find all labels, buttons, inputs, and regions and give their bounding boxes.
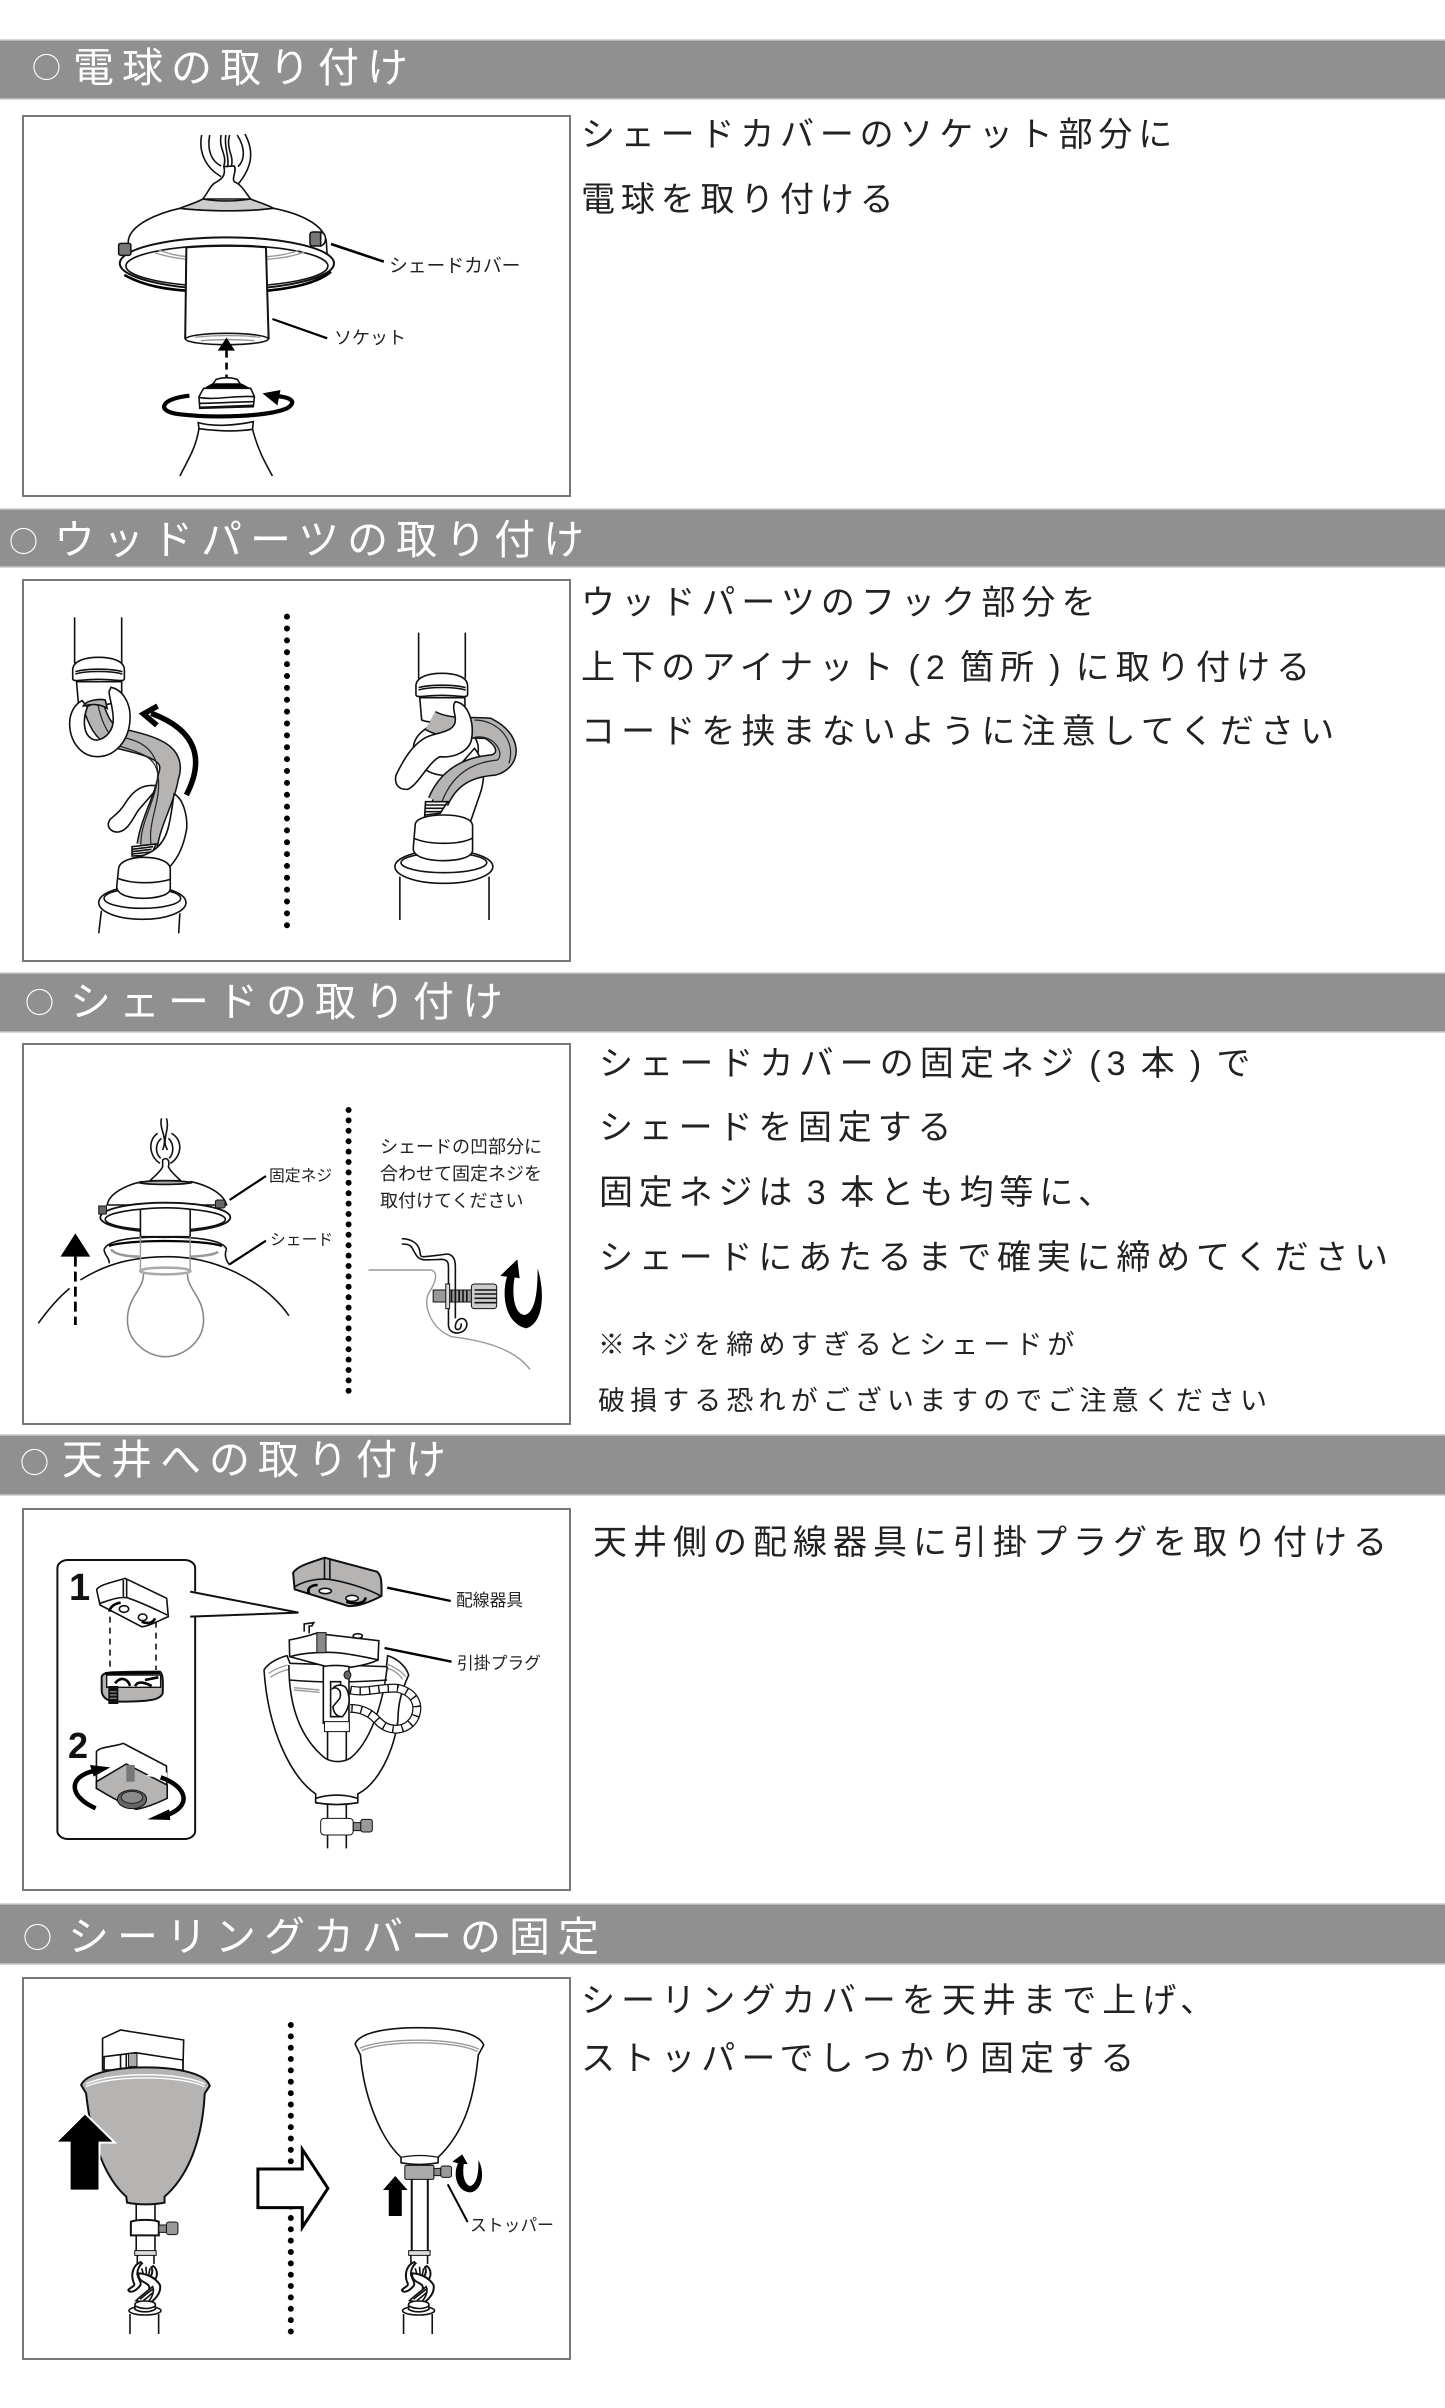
heading: shade: ○ [25,980,54,1022]
body text: wood parts step: ウッドパーツのフック部分を [581,584,1102,622]
body text: shade step: シェードにあたるまで確実に締めてください [599,1239,1394,1277]
section 5: ceiling cover fixing [0,1904,1445,2359]
arrows: step 2 rotation [75,1765,184,1820]
body text: ceiling cover step [581,1982,1220,2078]
body text: bulb step [581,116,1178,219]
body text: shade step [599,1045,1394,1277]
arrow: large up [55,2113,115,2191]
label: socket: ソケット [334,328,406,348]
note: align with recess: 合わせて固定ネジを [380,1164,542,1184]
divider: dotted [284,617,290,927]
arrow: tighten rotation [500,1259,542,1328]
arrow: stopper rotation [452,2154,482,2192]
heading: bulb installation: 電球の取り付け [73,45,416,91]
heading: wood parts: ウッドパーツの取り付け [54,517,592,563]
illustration: clip and screw detail [368,1239,530,1369]
arrow: upward dashed [218,338,235,378]
section 3: shade installation [0,973,1445,1424]
lower hook [132,844,156,856]
note: caution: 破損する恐れがございますのでご注意ください [598,1386,1272,1416]
label: hook plug: 引掛プラグ [457,1654,541,1673]
heading: shade [0,973,1445,1032]
leader lines [272,244,384,338]
illustration: raising cover [81,2030,210,2255]
chain link and cord: left [128,2255,161,2334]
illustration: after hooking [395,633,511,920]
body text: bulb step: シェードカバーのソケット部分に [581,116,1178,154]
heading: bulb installation [0,40,1445,99]
shade neck [104,1237,227,1249]
arrow: rotation [164,390,292,416]
panel: ceiling cover illustration [23,1978,570,2359]
body text: shade step: 固定ネジは 3 本とも均等に、 [599,1174,1118,1212]
heading: ceiling: ○ [20,1440,49,1482]
heading: ceiling cover: ○ [23,1915,52,1957]
heading: ceiling: 天井への取り付け [62,1437,454,1483]
heading: bulb installation: ○ [32,45,61,87]
twisted cord [93,705,170,845]
step 1 plug [102,1672,163,1704]
illustration: shade cover and shade [38,1118,289,1357]
eye ring [70,687,130,757]
panel: shade illustration [23,1044,570,1424]
step 2 assembly [96,1743,167,1809]
heading: ceiling cover: シーリングカバーの固定 [68,1914,607,1960]
chain link and cord: right [402,2255,435,2334]
body text: ceiling step: 天井側の配線器具に引掛プラグを取り付ける [593,1524,1393,1562]
stem and hook [323,1665,349,1723]
ceiling fitting [293,1558,382,1606]
arrow: small up [383,2176,408,2216]
section 2: wood parts installation [0,509,1445,961]
leader lines [385,1588,452,1662]
body text: shade step: シェードカバーの固定ネジ (3 本 ) で [599,1045,1256,1083]
illustration: before hooking [70,617,187,933]
note: caution [598,1330,1272,1416]
panel: ceiling illustration [23,1509,570,1890]
bulb [127,1274,204,1357]
illustration: fixed cover [355,2028,484,2255]
body text: bulb step: 電球を取り付ける [581,181,899,219]
arrow: upward dashed [60,1233,90,1325]
heading: ceiling [0,1435,1445,1495]
note: align with recess: 取付けてください [380,1191,523,1211]
bottom stem and stopper [316,1795,358,1804]
divider: dotted [288,2025,294,2333]
heading: ceiling cover [0,1904,1445,1964]
step number 2: 2 [68,1725,88,1766]
heading: shade: シェードの取り付け [70,979,511,1025]
note: align with recess: シェードの凹部分に [380,1137,542,1157]
step 1 ceiling box [97,1578,168,1704]
callout pointer [190,1591,298,1617]
note: align with recess [380,1137,542,1211]
panel: bulb illustration [23,116,570,496]
heading: wood parts [0,509,1445,567]
body text: wood parts step [581,584,1340,751]
label: shade: シェード [270,1232,333,1249]
label: stopper: ストッパー [470,2216,554,2235]
panel: wood parts illustration [23,580,570,961]
twisted cord [350,1688,417,1729]
leader lines [230,1176,266,1264]
divider: dotted [346,1110,352,1393]
body text: shade step: シェードを固定する [599,1109,957,1147]
body text: wood parts step: 上下のアイナット (2 箇所 ) に取り付ける [581,649,1316,687]
illustration: shade cover, socket and bulb [119,134,384,476]
arrow: hook upward [143,706,196,795]
note: caution: ※ネジを締めすぎるとシェードが [598,1330,1080,1360]
arrow: step to next [258,2149,328,2227]
label: shade cover: シェードカバー [389,255,520,276]
shade dome [38,1257,289,1323]
screws [119,232,326,255]
lower hook arm [108,785,158,832]
label: wiring fixture: 配線器具 [456,1591,523,1610]
heading: wood parts: ○ [9,519,38,561]
label: fixing screw: 固定ネジ [269,1167,332,1185]
ceiling cover with plug [264,1623,417,1848]
body text: wood parts step: コードを挟まないように注意してください [581,713,1340,751]
section 4: ceiling installation [0,1435,1445,1890]
inset: steps 1 and 2 [57,1560,298,1839]
bulb [180,378,272,476]
section 1: bulb installation [0,40,1445,496]
body text: ceiling cover step: ストッパーでしっかり固定する [581,2040,1140,2078]
step number 1: 1 [69,1567,90,1609]
body text: ceiling cover step: シーリングカバーを天井まで上げ、 [581,1982,1220,2020]
leader line [448,2184,468,2222]
